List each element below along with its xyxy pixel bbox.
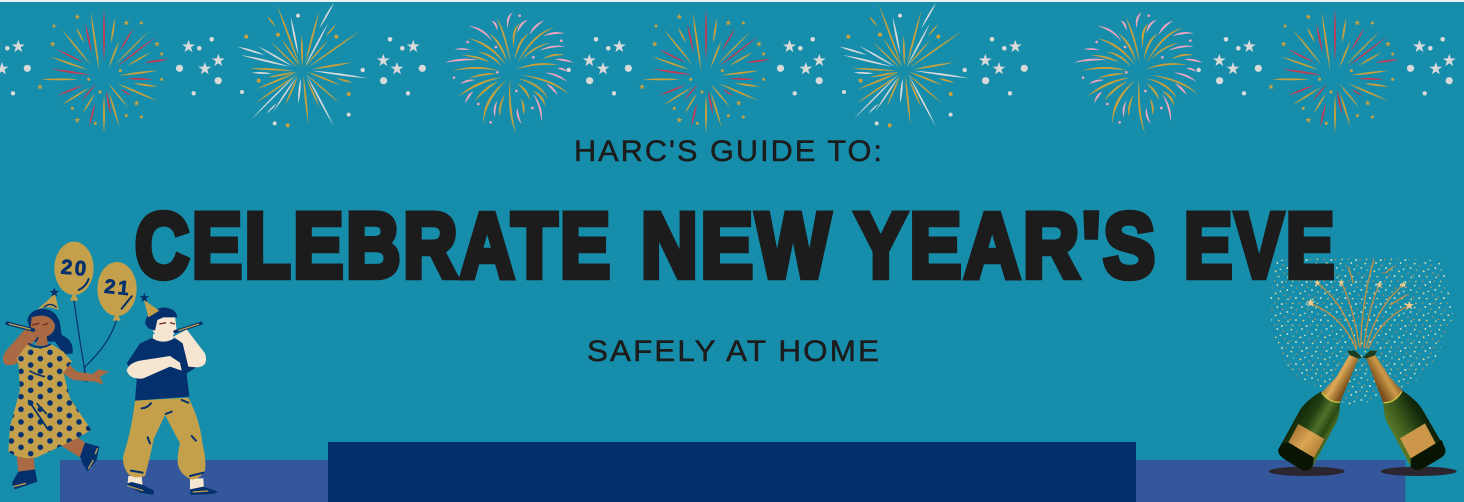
illustration: champagne bottles — [1267, 253, 1457, 476]
title: Celebrate New Year's Eve — [135, 195, 1337, 297]
star cluster 6 — [962, 37, 1028, 96]
firework red and gold 2 — [639, 8, 770, 133]
subtitle: Safely at home: SAFELY AT HOME — [587, 335, 881, 368]
firework pink and gold 2 — [1074, 13, 1202, 133]
man in navy shirt — [123, 293, 218, 495]
star cluster 1 — [0, 37, 31, 96]
firework red and gold 3 — [1268, 8, 1399, 133]
balloon 20: 20 — [60, 256, 89, 281]
balloon 20 — [54, 242, 94, 301]
light blue base band — [60, 460, 1406, 502]
right bottle — [1363, 351, 1445, 470]
champagne spray dots — [1267, 253, 1457, 410]
firework red and gold 1 — [37, 8, 168, 133]
balloon 21: 21 — [103, 276, 132, 300]
bottle shadows — [1269, 467, 1457, 476]
illustration: party people with balloons — [3, 242, 218, 495]
firework pink and gold 1 — [445, 13, 573, 133]
champagne streams and stars — [1306, 260, 1414, 350]
title: Celebrate New Year's Eve: NEW — [641, 195, 833, 297]
left bottle — [1278, 351, 1362, 471]
balloon 21 — [97, 262, 137, 321]
title: Celebrate New Year's Eve: CELEBRATE — [135, 195, 613, 297]
star cluster 4 — [566, 37, 632, 96]
star cluster 5 — [777, 37, 826, 96]
star cluster 2 — [176, 37, 225, 96]
firework white and gold 2 — [839, 3, 970, 127]
title: Celebrate New Year's Eve: EVE — [1184, 195, 1337, 297]
firework white and gold 1 — [237, 3, 368, 127]
subtitle: HARC'S GUIDE TO: HARC'S GUIDE TO: — [574, 135, 884, 168]
navy base panel — [328, 442, 1136, 502]
star cluster 3 — [360, 37, 426, 96]
woman in polka dot dress — [3, 287, 109, 489]
star cluster 8 — [1407, 37, 1456, 96]
fireworks row — [0, 3, 1456, 133]
top white edge — [0, 0, 1464, 2]
title: Celebrate New Year's Eve: YEAR'S — [855, 195, 1158, 297]
star cluster 7 — [1196, 37, 1262, 96]
balloon strings — [74, 301, 117, 382]
